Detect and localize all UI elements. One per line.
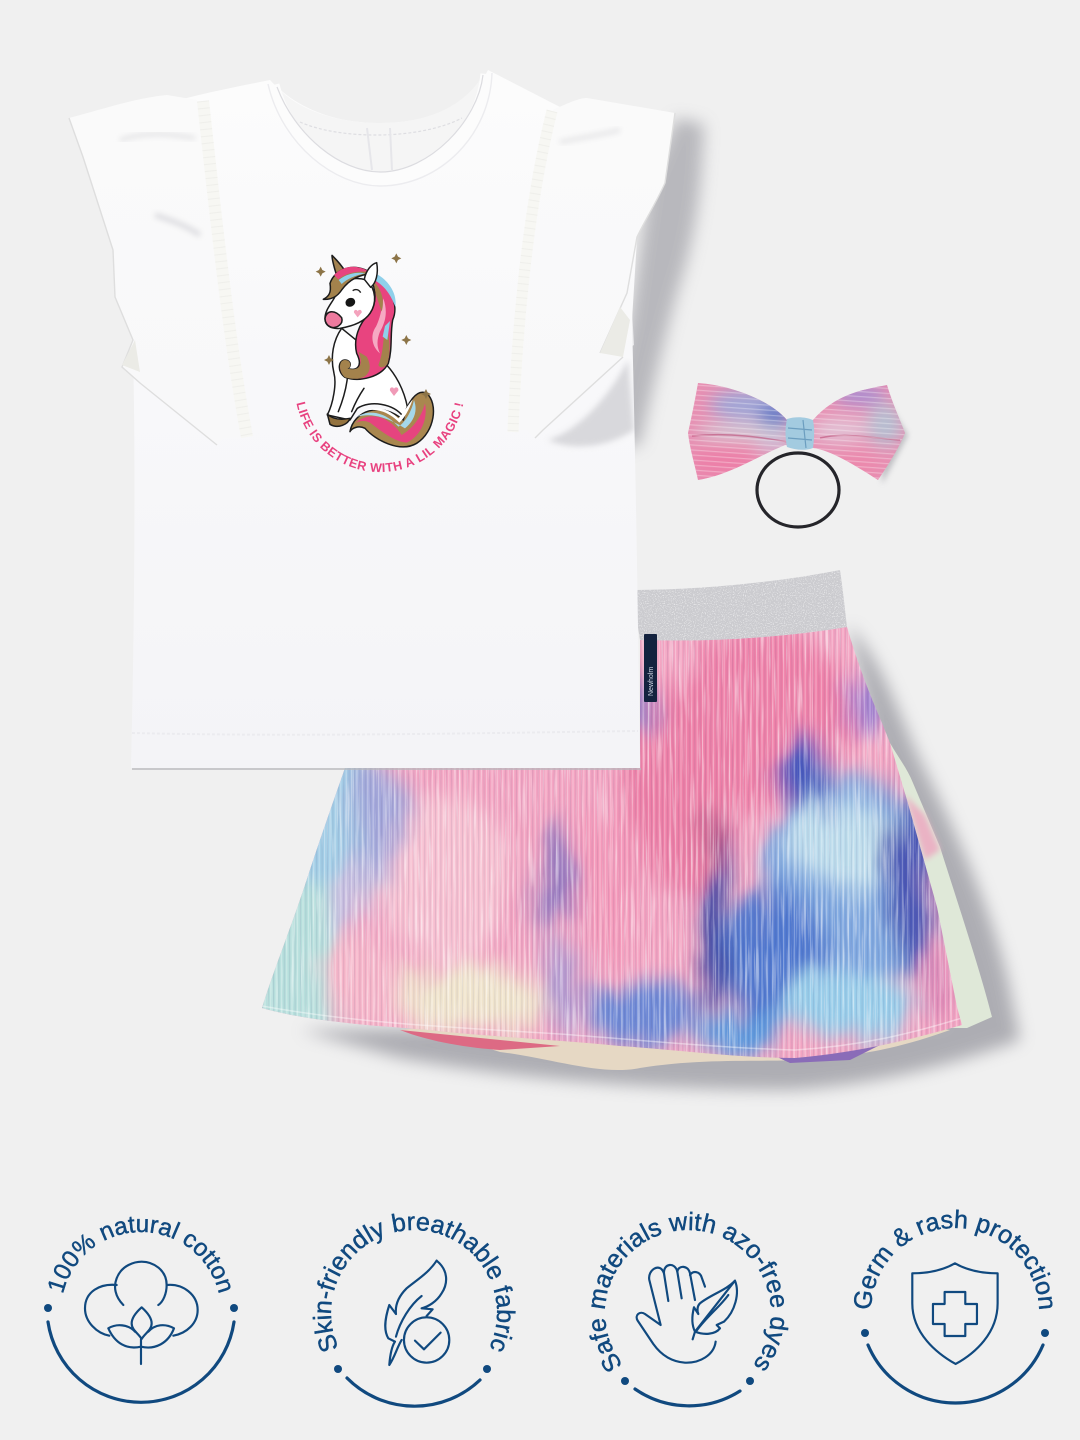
collar seam xyxy=(268,73,492,186)
back placket xyxy=(367,128,392,170)
badge dots xyxy=(44,1304,238,1312)
skirt back layer pink band xyxy=(905,795,940,860)
unicorn haunch hearts xyxy=(390,387,398,396)
tie-dye skirt xyxy=(230,565,992,1070)
badge text: Safe materials with azo-free dyes xyxy=(589,1212,788,1372)
badge text: 100% natural cotton xyxy=(48,1216,231,1293)
right shirt shadow under sleeve xyxy=(548,360,634,446)
bow knot xyxy=(786,417,814,450)
unicorn mane xyxy=(339,274,396,379)
icon: feather with check xyxy=(385,1261,449,1365)
unicorn forelock xyxy=(323,267,372,299)
icon: cotton boll xyxy=(85,1262,198,1364)
unicorn head xyxy=(325,279,375,328)
badge dots xyxy=(334,1365,491,1373)
unicorn muzzle xyxy=(325,312,342,328)
unicorn brow xyxy=(353,290,361,293)
collar rib xyxy=(273,74,487,179)
badge arc xyxy=(635,1389,740,1406)
badge: germ and rash protection xyxy=(854,1209,1052,1405)
badge: 100% natural cotton xyxy=(44,1216,238,1404)
badge dots xyxy=(861,1329,1049,1337)
neckline back xyxy=(277,75,483,172)
badge arc xyxy=(868,1345,1043,1403)
right ruffle sleeve xyxy=(507,98,675,438)
woven label tag: Newholm xyxy=(648,667,655,696)
silver waistband xyxy=(638,570,847,640)
badge arc xyxy=(347,1378,480,1406)
icon: hand and feather xyxy=(637,1265,737,1363)
panel: product flat lay xyxy=(68,70,1026,1100)
hair bow xyxy=(680,375,915,527)
collar inner edge xyxy=(277,75,483,172)
back collar stitch xyxy=(300,118,462,135)
bow wings xyxy=(688,383,905,480)
print slogan: LIFE IS BETTER WITH A LIL MAGIC ! xyxy=(296,402,464,472)
skirt front panel xyxy=(262,627,962,1058)
white top xyxy=(68,70,676,770)
elastic hair tie xyxy=(757,453,839,527)
unicorn body xyxy=(327,328,407,420)
badge: skin-friendly breathable fabric xyxy=(312,1214,516,1408)
unicorn hoof xyxy=(327,414,350,426)
woven label tag xyxy=(644,634,657,702)
unicorn leg line xyxy=(338,378,364,412)
unicorn horn xyxy=(332,255,345,273)
unicorn tail xyxy=(350,392,433,447)
shirt hem shadow xyxy=(132,768,641,770)
unicorn print xyxy=(316,253,433,447)
shirt cast shadow xyxy=(600,118,704,450)
skirt back layer right xyxy=(890,743,992,1028)
unicorn eye xyxy=(344,296,357,308)
left ruffle sleeve xyxy=(69,95,253,445)
unicorn cheek heart xyxy=(354,310,362,317)
unicorn ear xyxy=(364,263,377,287)
badge text: Skin-friendly breathable fabric xyxy=(312,1214,516,1352)
skirt under layer hem xyxy=(400,1000,950,1070)
skirt cast shadow xyxy=(300,625,1020,1090)
sparkle stars xyxy=(316,253,431,399)
shirt body xyxy=(131,70,640,768)
badge arc xyxy=(48,1322,234,1402)
badge text: Germ & rash protection xyxy=(854,1209,1052,1310)
shirt under-sleeve piece right xyxy=(600,305,634,365)
hem stitching xyxy=(132,731,638,735)
icon: shield with cross xyxy=(912,1263,998,1364)
badge row xyxy=(44,1209,1052,1408)
badge dots xyxy=(621,1377,754,1385)
badge: safe materials with azo-free dyes xyxy=(589,1212,788,1408)
bow shadow xyxy=(880,390,908,484)
